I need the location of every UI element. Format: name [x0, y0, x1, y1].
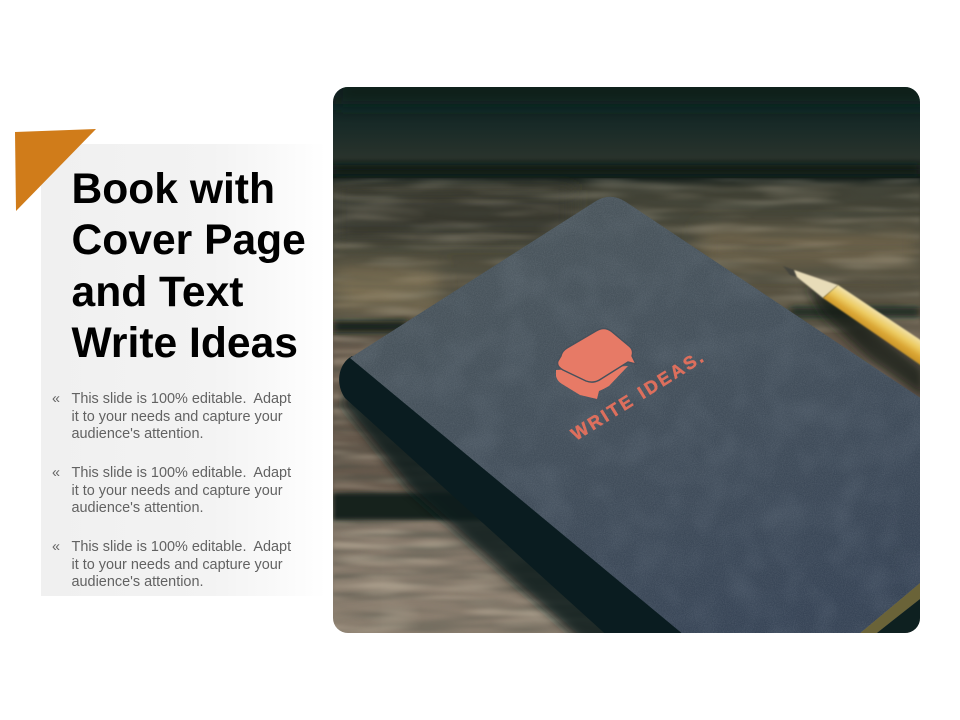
label: WRITE IDEAS on cover: WRITE IDEAS. [568, 346, 709, 444]
notebook spine and shadow [337, 356, 682, 633]
text block: second bullet: This slide is 100% editable. Adapt it to your needs and capture your audience's attention. [72, 465, 291, 516]
title: Book with [72, 165, 275, 213]
notebook cover [350, 197, 925, 640]
title: Cover Page [72, 216, 306, 264]
text block: second bullet: « [52, 465, 60, 481]
photo: notebook on wooden table [333, 87, 920, 633]
text block: third bullet: « [52, 539, 60, 555]
icon: speech bubbles logo [556, 328, 636, 399]
panel: text background [41, 144, 326, 596]
title: Write Ideas [72, 319, 298, 367]
title: and Text [72, 268, 243, 316]
wooden table [333, 80, 933, 633]
text block: third bullet: This slide is 100% editable. Adapt it to your needs and capture your audience's attention. [72, 539, 291, 590]
notebook page edges [860, 583, 920, 633]
title [72, 165, 306, 367]
text block: first bullet: « [52, 391, 60, 407]
text block: first bullet: This slide is 100% editable. Adapt it to your needs and capture your audience's attention. [72, 391, 291, 442]
icon: orange corner triangle [15, 129, 96, 211]
icon: pencil [783, 266, 925, 398]
